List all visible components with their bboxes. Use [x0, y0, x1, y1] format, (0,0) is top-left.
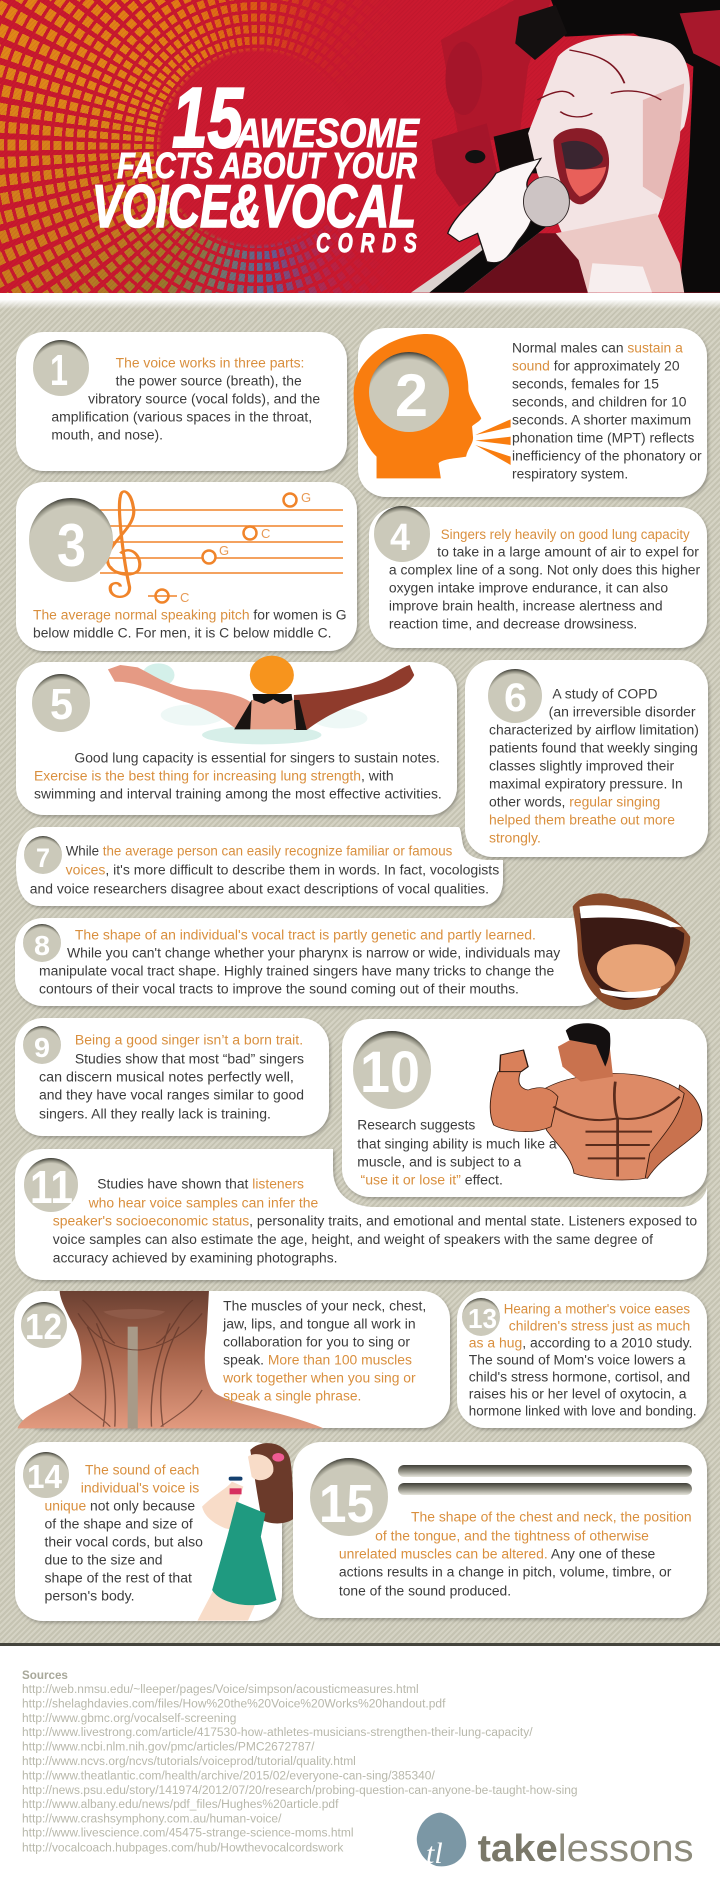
number badge 2	[369, 352, 449, 432]
sources list: http://www.crashsymphony.com.au/human-voice/	[22, 1814, 282, 1826]
text: fact 6: A study of COPD	[552, 686, 658, 701]
number badge 5: 5	[50, 680, 73, 729]
text: fact 6: patients found that weekly singing	[489, 740, 698, 755]
text: fact 6	[489, 686, 699, 846]
number badge 15	[310, 1458, 388, 1536]
text: fact 1: the power source (breath), the	[116, 374, 302, 389]
text: fact 14: person's body.	[44, 1589, 134, 1604]
text: fact 8: manipulate vocal tract shape. Highly trained singers have many tricks to change the	[39, 964, 554, 979]
text: fact 14	[44, 1462, 203, 1604]
sources list	[22, 1670, 578, 1854]
text: fact 15: actions results in a change in pitch, volume, timbre, or	[339, 1565, 672, 1580]
title: 15	[172, 71, 244, 166]
number badge 15: 15	[319, 1474, 374, 1534]
panel: fact 2	[354, 328, 707, 497]
panel: fact 5	[16, 656, 457, 815]
text: fact 11	[53, 1177, 697, 1266]
text: fact 11: who hear voice samples can infer the	[88, 1196, 318, 1211]
text: fact 6: classes slightly improved their	[489, 758, 675, 773]
panel: fact 7	[16, 827, 503, 906]
panel: fact 3	[16, 482, 357, 651]
panel: fact 15	[293, 1442, 707, 1618]
text: fact 6: other words, regular singing	[489, 794, 660, 809]
text: fact 6: strongly.	[489, 831, 541, 846]
illustration: neck muscles	[17, 1291, 324, 1428]
sources list: http://shelaghdavies.com/files/How%20the%20Voice%20Works%20handout.pdf	[22, 1699, 446, 1711]
text: fact 8: The shape of an individual's vocal tract is partly genetic and partly learned.	[75, 928, 536, 943]
illustration: music staff with notes: G	[219, 543, 229, 558]
title: AWESOME	[235, 110, 420, 156]
number badge 12: 12	[25, 1306, 62, 1347]
number badge 10: 10	[360, 1040, 420, 1105]
text: fact 12: collaboration for you to sing or	[223, 1334, 411, 1349]
panel: fact 1	[16, 332, 347, 471]
logo: takelessons: tl	[426, 1837, 443, 1870]
number badge 14	[23, 1452, 69, 1498]
number badge 7	[24, 836, 62, 874]
sources list: http://www.livestrong.com/article/417530-how-athletes-musicians-strengthen-their-lung-capacity/	[22, 1727, 533, 1739]
text: fact 8	[39, 928, 560, 997]
text: fact 2: seconds, females for 15	[512, 376, 659, 391]
number badge 6	[488, 669, 542, 723]
number badge 9: 9	[34, 1032, 50, 1063]
text: fact 12: The muscles of your neck, chest,	[223, 1298, 426, 1313]
text: fact 9: singers. All they really lack is training.	[39, 1107, 271, 1122]
text: fact 1: The voice works in three parts:	[116, 355, 304, 370]
text: fact 7: While the average person can easily recognize familiar or famous	[66, 844, 453, 859]
text: fact 14: unique not only because	[44, 1499, 195, 1514]
sources list: http://www.livescience.com/45475-strange-science-moms.html	[22, 1828, 354, 1840]
text: fact 13: raises his or her level of oxytocin, a	[469, 1387, 687, 1402]
number badge 7: 7	[36, 843, 50, 873]
text: fact 9: can discern musical notes perfectly well,	[39, 1070, 294, 1085]
panel: fact 4	[369, 506, 707, 648]
text: fact 9: and they have vocal ranges similar to good	[39, 1088, 304, 1103]
text: fact 5: Good lung capacity is essential for singers to sustain notes.	[74, 750, 440, 765]
title	[92, 71, 420, 258]
text: fact 2: sound for approximately 20	[512, 358, 680, 373]
number badge 8: 8	[34, 930, 50, 961]
sources list: Sources	[22, 1670, 68, 1682]
text: fact 13: child's stress hormone, cortisol, and	[469, 1369, 690, 1384]
text: fact 13: as a hug, according to a 2010 study.	[469, 1335, 692, 1350]
text: fact 9: Studies show that most “bad” singers	[75, 1051, 304, 1066]
text: fact 7: and voice researchers disagree about exact descriptions of vocal qualities.	[30, 881, 489, 896]
text: fact 10: “use it or lose it” effect.	[360, 1173, 503, 1188]
text: fact 9	[39, 1033, 304, 1122]
text: fact 4: a complex line of a song. Not only does this higher	[389, 563, 701, 578]
text: fact 11: Studies have shown that listeners	[97, 1177, 304, 1192]
text: fact 9: Being a good singer isn’t a born trait.	[75, 1033, 303, 1048]
panel: fact 9	[15, 1018, 329, 1136]
text: fact 12: speak a single phrase.	[223, 1389, 361, 1404]
number badge 2: 2	[395, 362, 428, 429]
text: fact 10: Research suggests	[357, 1118, 476, 1133]
text: fact 12: work together when you sing or	[222, 1371, 416, 1386]
text: fact 3: The average normal speaking pitch for women is G	[33, 608, 347, 623]
number badge 3	[29, 498, 113, 582]
text: fact 14: their vocal cords, but also	[44, 1535, 203, 1550]
number badge 6: 6	[504, 676, 527, 720]
text: fact 1	[51, 355, 320, 443]
sources list: http://news.psu.edu/story/141974/2012/07/20/research/probing-question-can-anyone-be-taught-how-sing	[22, 1785, 578, 1797]
illustration: music staff with notes: C	[180, 590, 189, 605]
text: fact 7	[30, 844, 499, 896]
number badge 3: 3	[57, 512, 86, 579]
text: fact 7: voices, it's more difficult to describe them in words. In fact, vocologists	[66, 862, 499, 877]
logo: takelessons	[417, 1813, 694, 1870]
text: fact 6: (an irreversible disorder	[549, 704, 696, 719]
text: fact 13: children's stress just as much	[509, 1319, 690, 1334]
number badge 9	[23, 1026, 61, 1064]
sources list: http://www.theatlantic.com/health/archive/2015/02/everyone-can-sing/385340/	[22, 1770, 436, 1782]
sources list: http://www.gbmc.org/vocalself-screening	[22, 1713, 236, 1725]
number badge 10	[353, 1031, 431, 1109]
text: fact 11: speaker's socioeconomic status , personality traits, and emotional and mental state. Listeners exposed to	[53, 1214, 697, 1229]
text: fact 1: mouth, and nose).	[51, 428, 163, 443]
illustration: open mouth	[573, 893, 690, 1010]
number badge 14: 14	[27, 1458, 63, 1495]
text: fact 4: improve brain health, increase alertness and	[389, 599, 663, 614]
illustration: swimmer	[108, 656, 414, 744]
text: fact 5: swimming and interval training among the most effective activities.	[34, 787, 442, 802]
text: fact 2: Normal males can sustain a	[512, 340, 683, 355]
illustration: music staff with notes	[100, 490, 343, 605]
text: fact 15: tone of the sound produced.	[339, 1584, 511, 1599]
text: fact 4: oxygen intake improve endurance, it can also	[389, 581, 668, 596]
number badge 1	[33, 340, 89, 396]
text: fact 11: voice samples can also estimate the age, height, and weight of speakers with the same degree of	[53, 1232, 653, 1247]
text: fact 14: individual's voice is	[81, 1480, 200, 1495]
panel: fact 13	[457, 1291, 707, 1428]
text: fact 8: contours of their vocal tracts to improve the sound coming out of their mouths.	[39, 982, 519, 997]
text: fact 13: hormone linked with love and bonding.	[469, 1404, 697, 1419]
text: fact 2: seconds. A shorter maximum	[512, 412, 691, 427]
panel: fact 11	[15, 1149, 707, 1280]
illustration: singer with microphone	[411, 0, 720, 293]
text: fact 13	[469, 1302, 697, 1419]
text: fact 12: jaw, lips, and tongue all work in	[222, 1316, 416, 1331]
text: fact 1: amplification (various spaces in the throat,	[51, 410, 312, 425]
text: fact 3	[33, 608, 347, 640]
text: fact 14: due to the size and	[44, 1553, 162, 1568]
panel: fact 14	[15, 1442, 298, 1621]
number badge 8	[23, 924, 61, 962]
text: fact 14: of the shape and size of	[44, 1516, 193, 1531]
number badge 11: 11	[30, 1161, 73, 1213]
panel: fact 12	[14, 1291, 450, 1428]
number badge 4	[374, 506, 430, 562]
number badge 13	[462, 1298, 500, 1336]
number badge 4: 4	[390, 517, 410, 559]
illustration: muscular man flexing	[490, 1023, 702, 1180]
sources list: http://web.nmsu.edu/~lleeper/pages/Voice/simpson/acousticmeasures.html	[22, 1684, 419, 1696]
text: fact 5: Exercise is the best thing for increasing lung strength , with	[34, 769, 394, 784]
text: fact 11: accuracy achieved by examining photographs.	[53, 1251, 338, 1266]
text: fact 8: While you can't change whether your pharynx is narrow or wide, individuals may	[67, 946, 560, 961]
panel: fact 8	[15, 893, 690, 1010]
text: fact 10: muscle, and is subject to a	[357, 1154, 522, 1169]
text: fact 6: characterized by airflow limitation)	[489, 722, 699, 737]
title: CORDS	[316, 228, 417, 258]
text: fact 10: that singing ability is much like a	[357, 1136, 557, 1151]
text: fact 2: respiratory system.	[512, 466, 628, 481]
text: fact 3: below middle C. For men, it is C below middle C.	[33, 625, 332, 640]
panel: fact 6	[465, 660, 708, 857]
text: fact 14: The sound of each	[85, 1462, 199, 1477]
text: fact 4: to take in a large amount of air to expel for	[437, 545, 699, 560]
text: fact 15: The shape of the chest and neck, the position	[411, 1510, 692, 1525]
panel: fact 10	[342, 1019, 707, 1197]
text: fact 15	[339, 1510, 692, 1599]
text: fact 15: of the tongue, and the tightness of otherwise	[375, 1528, 649, 1543]
number badge 5	[32, 674, 90, 732]
text: fact 12: speak. More than 100 muscles	[223, 1352, 412, 1367]
text: fact 13: Hearing a mother's voice eases	[504, 1302, 690, 1317]
text: fact 5	[34, 750, 442, 802]
text: fact 2: inefficiency of the phonatory or	[512, 448, 702, 463]
sources list: http://vocalcoach.hubpages.com/hub/Howthevocalcordswork	[22, 1842, 344, 1854]
text: fact 4	[389, 527, 701, 632]
text: fact 1: vibratory source (vocal folds), and the	[88, 392, 320, 407]
illustration: music staff with notes: G	[301, 490, 311, 505]
text: fact 4: Singers rely heavily on good lung capacity	[441, 527, 690, 542]
icon: orange head speaking	[354, 334, 511, 478]
text: fact 2: seconds, and children for 10	[512, 394, 686, 409]
text: fact 2	[512, 340, 702, 481]
number badge 1: 1	[50, 346, 68, 395]
text: fact 2: phonation time (MPT) reflects	[512, 430, 695, 445]
text: fact 14: shape of the rest of that	[44, 1571, 192, 1586]
logo: takelessons: takelessons	[478, 1828, 694, 1870]
text: fact 13: The sound of Mom's voice lowers a	[469, 1352, 686, 1367]
number badge 13: 13	[468, 1303, 497, 1334]
text: fact 12	[222, 1298, 426, 1404]
text: fact 10	[357, 1118, 557, 1188]
title: FACTS ABOUT YOUR	[117, 145, 417, 186]
sources list: http://www.ncvs.org/ncvs/tutorials/voiceprod/tutorial/quality.html	[22, 1756, 356, 1768]
sources list: http://www.ncbi.nlm.nih.gov/pmc/articles/PMC2672787/	[22, 1742, 315, 1754]
text: fact 6: helped them breathe out more	[489, 812, 675, 827]
illustration: music staff with notes: C	[261, 526, 270, 541]
sources list: http://www.albany.edu/news/pdf_files/Hughes%20article.pdf	[22, 1799, 339, 1811]
illustration: girl singing	[197, 1443, 298, 1621]
text: fact 15: unrelated muscles can be altered. Any one of these	[339, 1547, 655, 1562]
text: fact 4: reaction time, and decrease drowsiness.	[389, 617, 637, 632]
icon: vocal cord grooves	[398, 1465, 692, 1495]
text: fact 6: maximal expiratory pressure. In	[489, 776, 683, 791]
title: VOICE&VOCAL	[92, 173, 416, 240]
